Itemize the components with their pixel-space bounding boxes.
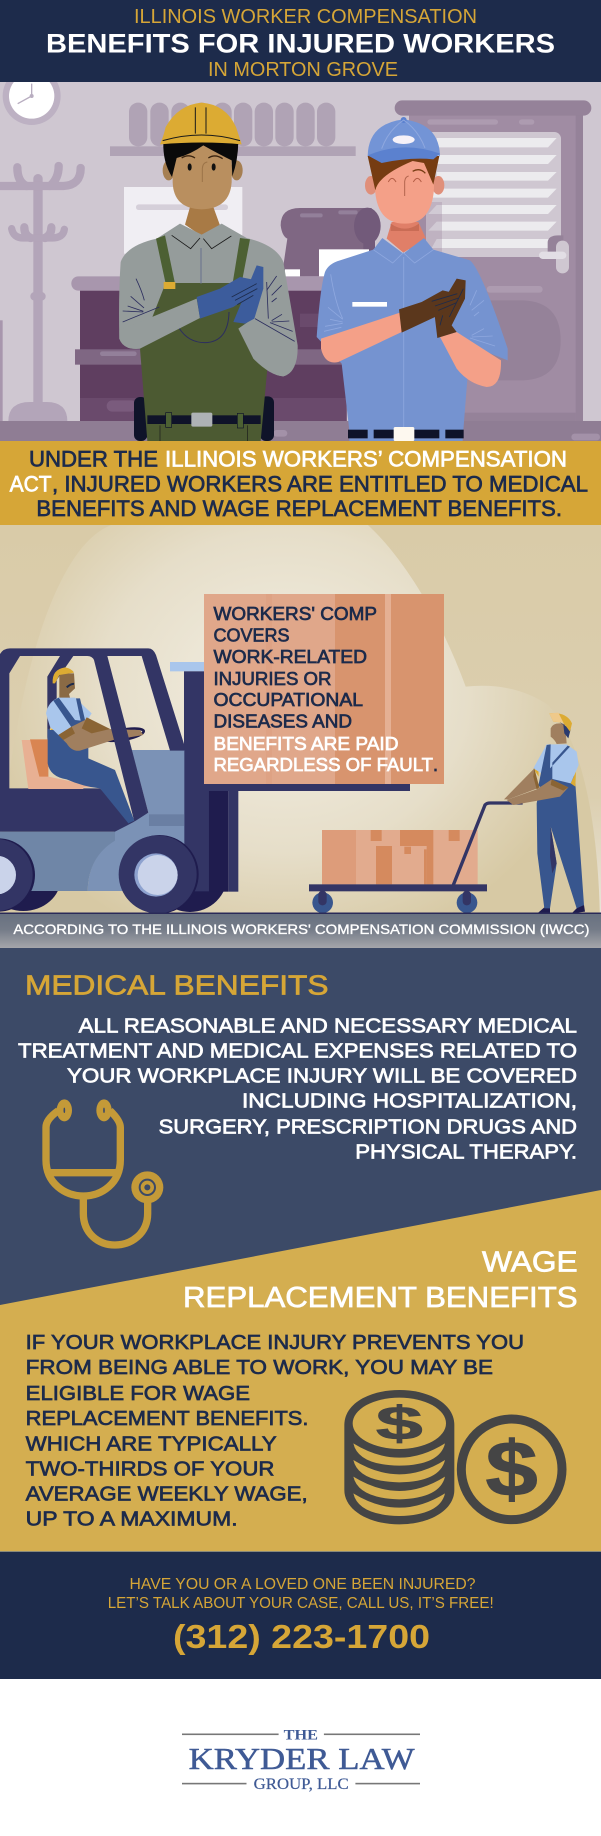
box text: workers' comp coverage: COVERS bbox=[214, 626, 290, 646]
statement text bbox=[10, 446, 588, 521]
background arches bbox=[0, 522, 600, 915]
wage replacement body text bbox=[26, 1331, 524, 1531]
hand cart and worker bbox=[309, 713, 585, 913]
door with window bbox=[395, 100, 591, 421]
brown gloves bbox=[435, 279, 466, 338]
panel: wage replacement benefits bbox=[0, 1190, 601, 1552]
logo: The Kryder Law Group bbox=[182, 1728, 420, 1793]
box text: workers' comp coverage: OCCUPATIONAL bbox=[214, 690, 363, 710]
cart bbox=[309, 803, 523, 913]
panel: call to action: LET’S TALK ABOUT YOUR CASE, CALL US, IT’S FREE! bbox=[108, 1595, 494, 1612]
shelf end, office door and second worker bbox=[296, 100, 601, 441]
icon: stacked coins and single coin: $ bbox=[486, 1426, 538, 1513]
box text: workers' comp coverage: BENEFITS ARE PAID bbox=[214, 734, 398, 754]
shelf with binders bbox=[110, 103, 300, 156]
wage replacement body text: UP TO A MAXIMUM. bbox=[26, 1508, 238, 1531]
belt bbox=[147, 415, 261, 424]
icon: wall clock bbox=[2, 82, 60, 125]
driver bbox=[46, 667, 145, 823]
header line: In Morton Grove: IN MORTON GROVE bbox=[208, 59, 398, 81]
box text: workers' comp coverage: DISEASES AND bbox=[214, 712, 352, 732]
box text: workers' comp coverage: REGARDLESS OF FAULT bbox=[214, 755, 433, 775]
blue cap bbox=[368, 119, 440, 156]
icon: stacked coins and single coin bbox=[344, 1390, 562, 1524]
standing worker bbox=[504, 713, 585, 913]
illustration: warehouse scene bbox=[0, 522, 601, 915]
gray shirt bbox=[119, 224, 298, 376]
source band bbox=[0, 912, 601, 948]
wage replacement body text: ELIGIBLE FOR WAGE bbox=[26, 1382, 250, 1405]
office background and first worker bbox=[0, 67, 311, 441]
statement text: BENEFITS AND WAGE REPLACEMENT BENEFITS. bbox=[36, 496, 562, 521]
box on forks with text bbox=[204, 594, 444, 791]
heading: medical benefits: MEDICAL BENEFITS bbox=[25, 969, 328, 1000]
mast bbox=[170, 662, 238, 892]
desk and printer bbox=[300, 208, 381, 421]
wage replacement body text: IF YOUR WORKPLACE INJURY PREVENTS YOU bbox=[26, 1331, 524, 1354]
forklift body bbox=[88, 750, 184, 891]
seat bbox=[22, 740, 100, 789]
call to action text: HAVE YOU OR A LOVED ONE BEEN INJURED? bbox=[130, 1576, 476, 1593]
wage replacement body text: AVERAGE WEEKLY WAGE, bbox=[26, 1482, 308, 1505]
statement text: , INJURED WORKERS ARE ENTITLED TO MEDICAL bbox=[52, 472, 588, 496]
worker with blue cap bbox=[317, 117, 508, 441]
box text: workers' comp coverage: INJURIES OR bbox=[214, 669, 332, 689]
cab frame bbox=[0, 648, 184, 822]
panel: medical benefits bbox=[0, 948, 601, 1308]
title: BENEFITS FOR INJURED WORKERS bbox=[46, 28, 555, 58]
blue gloves bbox=[233, 265, 263, 324]
header banner bbox=[0, 0, 601, 82]
box text: workers' comp coverage: WORKERS' COMP bbox=[214, 604, 377, 624]
medical benefits body text: YOUR WORKPLACE INJURY WILL BE COVERED bbox=[67, 1066, 577, 1088]
gold statement band bbox=[0, 441, 601, 525]
shelf end with binders bbox=[296, 103, 356, 156]
medical benefits body text: TREATMENT AND MEDICAL EXPENSES RELATED TO bbox=[18, 1041, 577, 1063]
belt bbox=[349, 438, 463, 441]
wage replacement body text: TWO-THIRDS OF YOUR bbox=[26, 1458, 274, 1480]
medical benefits body text: SURGERY, PRESCRIPTION DRUGS AND bbox=[159, 1117, 577, 1139]
blue shirt bbox=[317, 238, 508, 430]
reception desk bbox=[71, 276, 311, 421]
header line: Illinois Worker Compensation: ILLINOIS WORKER COMPENSATION bbox=[134, 6, 477, 28]
coat rack bbox=[0, 166, 81, 421]
sleeves bbox=[119, 299, 200, 349]
icon: stethoscope bbox=[46, 1099, 163, 1245]
paper on wall bbox=[124, 187, 242, 254]
wage replacement body text: REPLACEMENT BENEFITS. bbox=[26, 1407, 308, 1430]
panel: wage replacement benefits: REPLACEMENT BENEFITS bbox=[183, 1282, 578, 1314]
heading: wage replacement benefits: WAGE bbox=[482, 1247, 578, 1279]
icon: stacked coins and single coin: $ bbox=[376, 1397, 423, 1450]
worker with hard hat bbox=[119, 103, 298, 441]
box text: workers' comp coverage: . bbox=[433, 755, 438, 775]
forklift with driver bbox=[0, 648, 238, 914]
logo: The Kryder Law Group: THE bbox=[284, 1728, 318, 1744]
green overalls bbox=[140, 283, 267, 441]
hard hat bbox=[160, 103, 242, 144]
panel: call to action bbox=[0, 1551, 601, 1679]
arms bbox=[321, 313, 402, 363]
wheels bbox=[0, 835, 199, 914]
statement text: ACT bbox=[10, 472, 52, 496]
statement text: ILLINOIS WORKERS’ COMPENSATION bbox=[165, 446, 567, 472]
logo: The Kryder Law Group: GROUP, LLC bbox=[254, 1776, 349, 1793]
cartons bbox=[322, 830, 478, 884]
box text: workers' comp coverage: WORK-RELATED bbox=[214, 647, 367, 667]
medical benefits body text: PHYSICAL THERAPY. bbox=[355, 1142, 577, 1164]
illustration: two workers in an office bbox=[0, 67, 601, 441]
wage replacement body text: FROM BEING ABLE TO WORK, YOU MAY BE bbox=[26, 1356, 493, 1379]
box text: workers' comp coverage bbox=[214, 604, 438, 775]
medical benefits body text: INCLUDING HOSPITALIZATION, bbox=[242, 1091, 577, 1113]
statement text: UNDER THE bbox=[29, 446, 158, 472]
medical benefits body text bbox=[18, 1016, 577, 1164]
phone number: (312) 223-1700 bbox=[173, 1618, 430, 1655]
logo: The Kryder Law Group: KRYDER LAW bbox=[189, 1741, 415, 1776]
medical benefits body text: ALL REASONABLE AND NECESSARY MEDICAL bbox=[79, 1016, 577, 1038]
wage replacement body text: WHICH ARE TYPICALLY bbox=[26, 1432, 277, 1456]
source text: ACCORDING TO THE ILLINOIS WORKERS' COMPENSATION COMMISSION (IWCC) bbox=[13, 921, 589, 937]
